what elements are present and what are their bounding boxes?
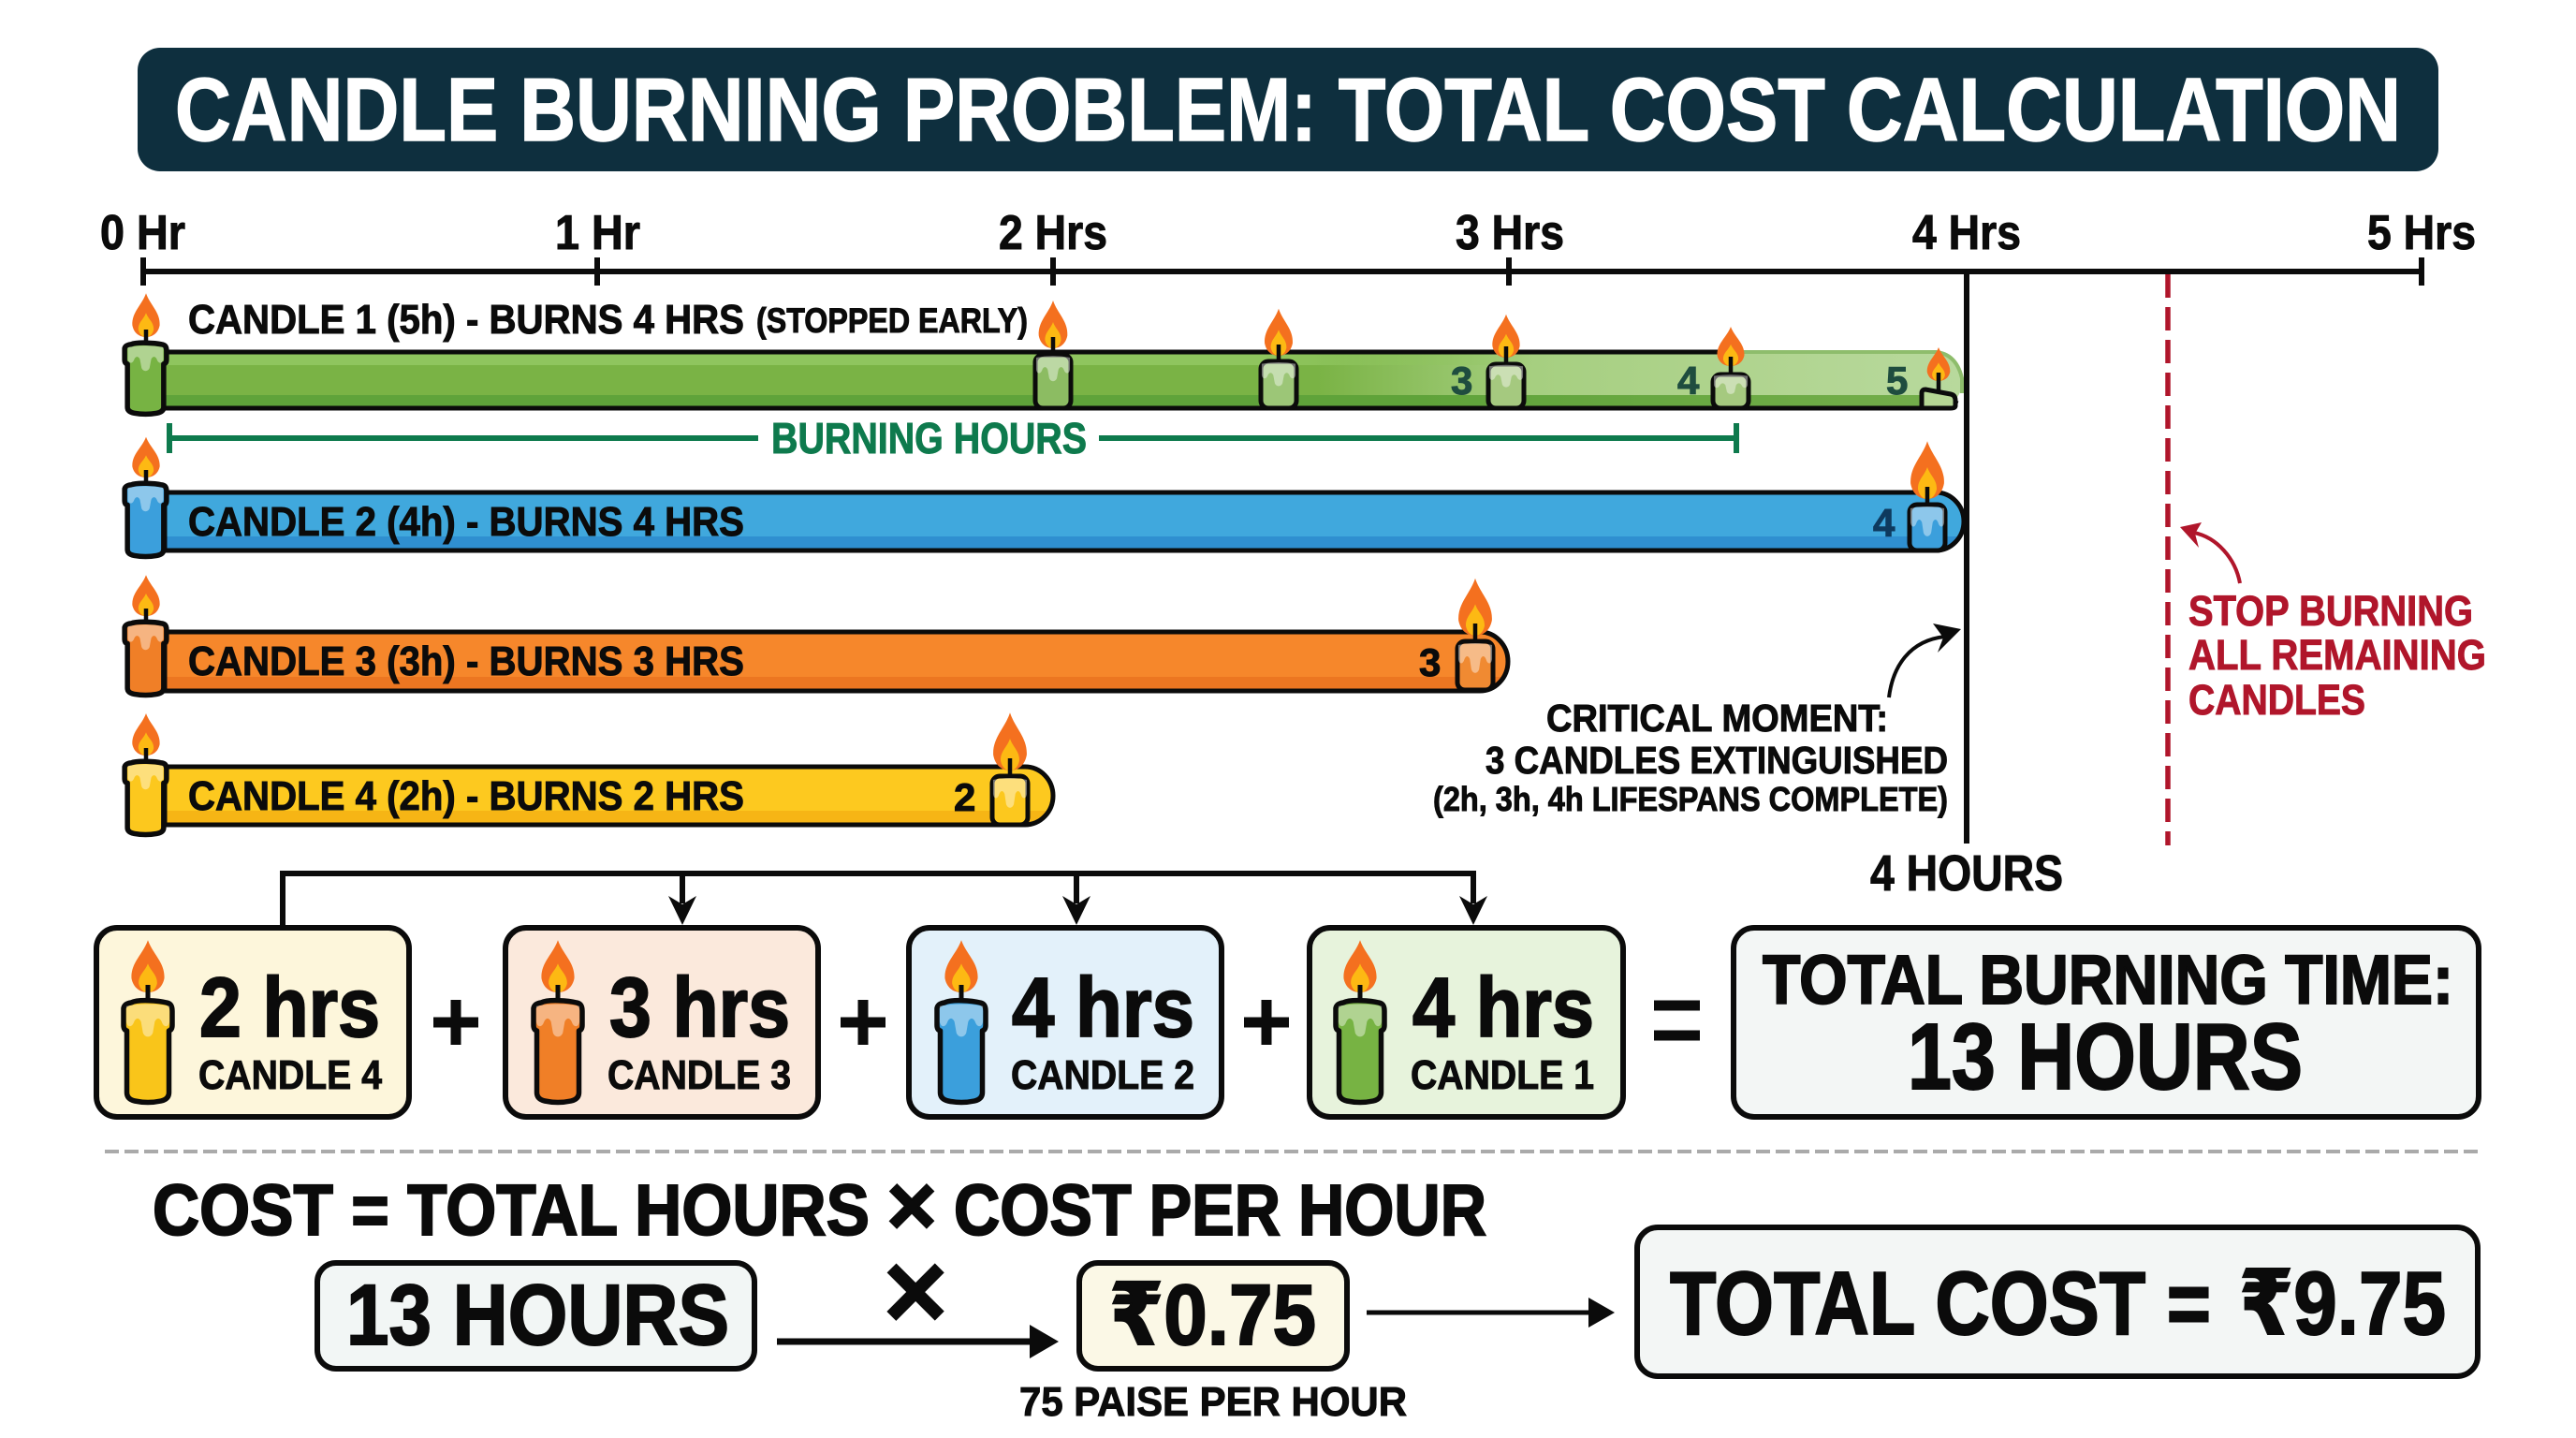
- hours value: 4 hrs: [1012, 961, 1194, 1055]
- plus sign: [433, 1000, 478, 1045]
- candle 2 label: CANDLE 2 (4h) - BURNS 4 HRS: [188, 499, 744, 545]
- cost formula: COST = TOTAL HOURS: [153, 1170, 870, 1251]
- hours value: 4 hrs: [1412, 961, 1594, 1055]
- candle 4 label: CANDLE 4 (2h) - BURNS 2 HRS: [188, 773, 744, 819]
- stop burning callout: STOP BURNING: [2188, 587, 2473, 635]
- icon: candle at 3.5 hours: [1713, 327, 1749, 408]
- cost formula: [153, 1158, 1486, 1254]
- candle 2 hour number: 4: [1873, 501, 1895, 545]
- panel: total cost: ₹9.75: [2239, 1254, 2446, 1354]
- hours value: 2 hrs: [199, 961, 380, 1055]
- icon: end candle 2: [1910, 441, 1945, 550]
- candle name: CANDLE 1: [1411, 1052, 1594, 1098]
- equals sign: [1654, 1005, 1700, 1035]
- panel: candle 2 hours: [909, 928, 1222, 1117]
- hour markers on candle 1: 3: [1451, 359, 1472, 403]
- cost formula: COST PER HOUR: [954, 1170, 1486, 1251]
- icon: start candle 2: [124, 437, 167, 557]
- arrow: hours to rate: [777, 1325, 1059, 1358]
- candle 1 label: CANDLE 1 (5h) - BURNS 4 HRS: [188, 297, 744, 343]
- icon: candle at 2 hours: [1035, 301, 1071, 408]
- candle name: CANDLE 3: [607, 1052, 791, 1098]
- candle 4 bar: [124, 712, 1053, 835]
- panel: total cost: [1637, 1227, 2478, 1376]
- hour markers on candle 1: 4: [1677, 359, 1700, 403]
- cost formula: ×: [886, 1158, 937, 1254]
- timeline axis: [100, 206, 2476, 286]
- icon: yellow candle: [124, 940, 172, 1103]
- panel: 13 hours: 13 HOURS: [346, 1268, 729, 1363]
- stop burning callout: ALL REMAINING: [2188, 631, 2486, 679]
- four hour marker line: [1964, 269, 1969, 844]
- panel: total cost: TOTAL COST =: [1670, 1254, 2211, 1354]
- icon: end candle 4: [992, 712, 1028, 825]
- rate note: 75 PAISE PER HOUR: [1019, 1379, 1407, 1425]
- timeline axis: 1 Hr: [555, 206, 640, 260]
- connector arrows: [283, 873, 1487, 925]
- icon: orange candle: [534, 940, 582, 1103]
- icon: blue candle: [937, 940, 986, 1103]
- candle 3 label: CANDLE 3 (3h) - BURNS 3 HRS: [188, 638, 744, 684]
- stopped early note: (STOPPED EARLY): [756, 301, 1028, 340]
- section divider: [105, 1150, 2481, 1153]
- plus sign: [841, 1000, 886, 1045]
- critical moment callout: [1433, 697, 1948, 818]
- candle 3 bar: [124, 575, 1508, 696]
- total value: 13 HOURS: [1908, 1005, 2303, 1109]
- stop burning callout: [2188, 587, 2486, 724]
- candle name: CANDLE 2: [1011, 1052, 1194, 1098]
- burning hours bracket: BURNING HOURS: [771, 414, 1087, 462]
- hour markers on candle 1: 5: [1886, 359, 1908, 403]
- candle 1 bar: [124, 293, 1963, 414]
- timeline axis: 5 Hrs: [2367, 206, 2476, 260]
- panel: cost per hour: ₹0.75: [1109, 1268, 1316, 1363]
- panel: candle 4 hours: [96, 928, 409, 1117]
- panel: candle 3 hours: [505, 928, 818, 1117]
- timeline axis: 0 Hr: [100, 206, 185, 260]
- panel: candle 1 hours: [1310, 928, 1623, 1117]
- four hours label: 4 HOURS: [1870, 845, 2063, 902]
- icon: start candle 4: [124, 713, 167, 835]
- hours value: 3 hrs: [609, 961, 790, 1055]
- timeline axis: 3 Hrs: [1456, 206, 1564, 260]
- timeline axis: 2 Hrs: [999, 206, 1107, 260]
- panel: total burning time: [1734, 928, 2479, 1117]
- critical moment callout: (2h, 3h, 4h LIFESPANS COMPLETE): [1433, 780, 1948, 818]
- multiply sign: ×: [883, 1228, 948, 1354]
- icon: stub candle at end: [1922, 347, 1955, 408]
- candle 3 hour number: 3: [1419, 640, 1441, 684]
- critical moment callout: 3 CANDLES EXTINGUISHED: [1486, 739, 1948, 782]
- candle 4 hour number: 2: [954, 775, 975, 819]
- stop burning callout: CANDLES: [2188, 676, 2365, 724]
- hour markers on candle 1: [1451, 359, 1908, 403]
- critical moment callout: CRITICAL MOMENT:: [1546, 697, 1888, 740]
- icon: start candle 1: [124, 293, 167, 414]
- arrow: critical moment: [1889, 624, 1961, 697]
- icon: candle at 3 hours: [1488, 315, 1524, 408]
- arrow: stop burning: [2180, 522, 2240, 583]
- burning hours bracket: [169, 414, 1736, 462]
- stop line: [2165, 274, 2171, 845]
- candle name: CANDLE 4: [198, 1052, 382, 1098]
- total label: TOTAL BURNING TIME:: [1763, 941, 2453, 1019]
- icon: green candle: [1336, 940, 1384, 1103]
- arrow: rate to total: [1367, 1298, 1615, 1328]
- icon: candle at 2.5 hours: [1261, 309, 1296, 408]
- plus sign: [1244, 1000, 1289, 1045]
- timeline axis: 4 Hrs: [1912, 206, 2021, 260]
- icon: end candle 3: [1457, 579, 1493, 690]
- candle 2 bar: [124, 437, 1964, 557]
- icon: start candle 3: [124, 575, 167, 696]
